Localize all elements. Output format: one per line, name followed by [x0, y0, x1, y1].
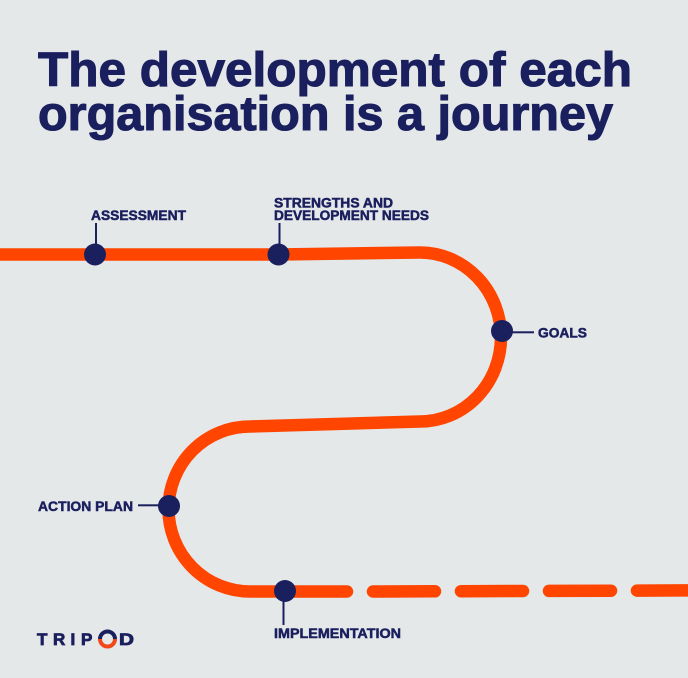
- dashed future path: [373, 590, 688, 592]
- milestone: action plan: [38, 495, 180, 517]
- solid journey path: [0, 252, 501, 592]
- logo: Tripod: [37, 630, 134, 649]
- milestone: goals: [491, 320, 587, 342]
- title: [38, 44, 632, 141]
- logo: Tripod: D: [119, 630, 134, 649]
- milestone: implementation: IMPLEMENTATION: [274, 626, 401, 641]
- title: organisation is a journey: [38, 88, 613, 141]
- title: The development of each: [38, 44, 632, 97]
- milestone: assessment: ASSESSMENT: [91, 208, 187, 223]
- milestone: strengths and development needs: DEVELOPMENT NEEDS: [274, 208, 429, 223]
- milestone: goals: GOALS: [538, 326, 587, 340]
- milestone: implementation: [274, 580, 401, 641]
- milestone: assessment: [84, 208, 187, 266]
- milestone: strengths and development needs: STRENGTHS AND: [274, 196, 393, 210]
- milestone: action plan: ACTION PLAN: [38, 499, 133, 514]
- milestone: strengths and development needs: [268, 196, 429, 266]
- logo: Tripod: TRIP: [37, 630, 92, 649]
